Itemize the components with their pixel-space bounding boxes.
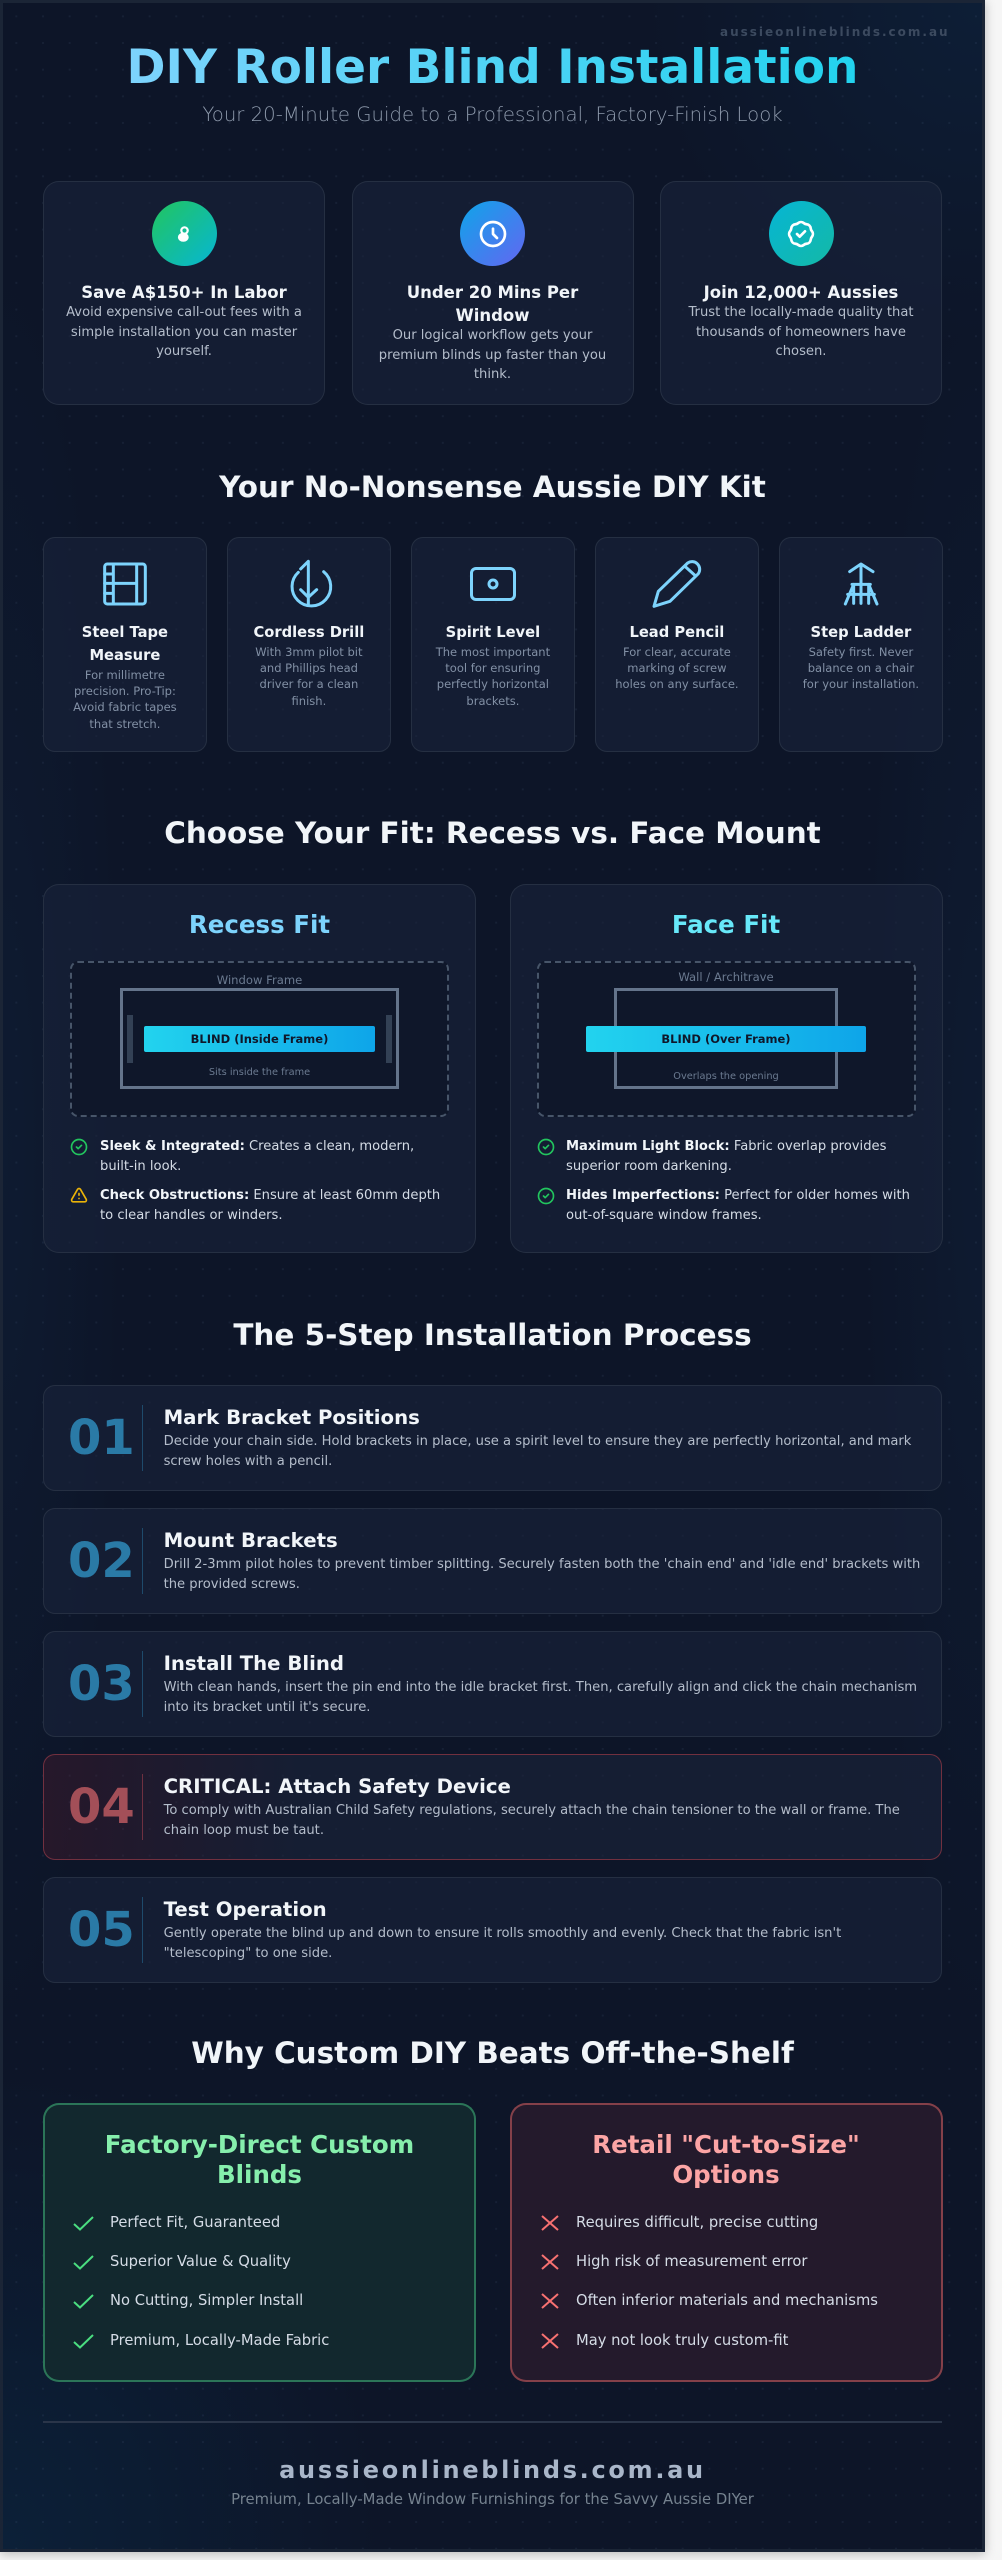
diagram: face fit: Wall / Architrave [678,970,774,984]
text: step 3 description: into its bracket until it's secure. [164,1700,370,1715]
text: step 2 description [164,1557,920,1592]
heading: recess fit: Recess Fit [189,910,330,939]
step number 04: 04 [68,1779,135,1835]
diagram: face fit: BLIND (Over Frame) [661,1032,791,1046]
step number 05: 05 [68,1902,135,1958]
bullet: maximum light block: Maximum Light Block: Fabric overlap provides [566,1139,886,1154]
text: cordless drill description: finish. [292,694,326,708]
text: step ladder description: Safety first. Never [809,644,913,658]
diagram: recess fit: Window Frame [217,973,302,987]
panel: spirit level [411,537,575,752]
list item: difficult cutting: Requires difficult, precise cutting [576,2214,818,2230]
subtitle: Your 20-Minute Guide to a Professional, Factory-Finish Look [202,103,783,126]
panel: step 4 critical [43,1754,942,1860]
list item: perfect fit: Perfect Fit, Guaranteed [110,2214,280,2230]
heading: step ladder: Step Ladder [811,624,911,641]
text: join aussies description: chosen. [776,344,826,359]
panel: save labor [43,181,325,405]
text: cordless drill description: and Phillips head [260,661,358,675]
text: under 20 mins description: Our logical workflow gets your [393,328,592,343]
diagram: face fit [537,961,916,1117]
heading: steel tape measure: Steel Tape [82,624,168,641]
heading: factory-direct: Factory-Direct Custom [105,2130,414,2159]
icon: ladder [844,562,878,606]
list item: premium fabric: Premium, Locally-Made Fabric [110,2332,329,2348]
text: step 1 description: screw holes with a pencil. [164,1454,332,1469]
heading: factory-direct [105,2130,414,2188]
text: step ladder description: balance on a chair [808,661,914,675]
text: save labor description [66,305,302,359]
heading: under 20 mins: Window [456,306,530,324]
panel: lead pencil [595,537,759,752]
text: step ladder description [803,644,919,691]
text: step 2 description: the provided screws. [164,1577,300,1592]
text: step 1 description: Decide your chain side. Hold brackets in place, use a spirit level to ensure they are perfectly horizontal, and mark [164,1434,911,1449]
panel: retail cut-to-size options [510,2103,942,2382]
bullet: check obstructions: to clear handles or winders. [100,1208,283,1223]
bullet: hides imperfections: Hides Imperfections: Perfect for older homes with [566,1188,910,1203]
text: under 20 mins description: premium blinds up faster than you [379,348,606,363]
icon: spirit level [470,567,516,601]
text: join aussies description: thousands of homeowners have [696,325,906,340]
text: spirit level description: brackets. [466,694,519,708]
bullet: sleek and integrated: Sleek & Integrated: Creates a clean, modern, [100,1139,414,1154]
panel: steel tape measure [43,537,207,752]
text: cordless drill description [255,644,362,708]
text: save labor description: Avoid expensive call-out fees with a [66,305,302,320]
text: steel tape description: that stretch. [89,717,160,731]
panel: cordless drill [227,537,391,752]
text: step 1 description [164,1434,912,1469]
panel: under 20 mins [352,181,634,405]
text: steel tape description: Avoid fabric tapes [73,700,177,714]
step number 02: 02 [68,1533,135,1589]
text: steel tape description: For millimetre [85,668,165,682]
footer domain: aussieonlineblinds.com.au [279,2456,706,2484]
text: lead pencil description: marking of screw [627,661,727,675]
diagram: recess fit: BLIND (Inside Frame) [191,1032,328,1046]
text: lead pencil description [615,644,739,691]
icon: tape measure [103,562,147,606]
text: under 20 mins description: think. [474,367,511,382]
text: spirit level description: tool for ensuring [445,661,540,675]
text: step 3 description: With clean hands, insert the pin end into the idle bracket first. Then, carefully align and click the chain mechanism [164,1680,917,1695]
step number 01: 01 [68,1410,135,1466]
list item: not custom: May not look truly custom-fit [576,2332,788,2348]
heading: steel tape measure [82,624,168,664]
title: DIY Roller Blind Installation [127,40,858,95]
text: step 2 description: Drill 2-3mm pilot holes to prevent timber splitting. Securely fasten both the 'chain end' and 'idle end' brackets with [164,1557,920,1572]
heading: installation process: The 5-Step Installation Process [233,1318,752,1352]
text: save labor description: simple installation you can master [71,325,297,340]
text: step 4 description [164,1803,900,1838]
text: spirit level description [436,644,550,708]
panel: step 5 [43,1877,942,1983]
text: step 5 description: "telescoping" to one side. [164,1946,332,1961]
text: steel tape description: precision. Pro-Tip: [74,684,176,698]
step number 03: 03 [68,1656,135,1712]
heading: steel tape measure: Measure [89,647,160,664]
icon: clock [460,201,525,266]
heading: cordless drill: Cordless Drill [254,624,364,641]
panel: step 3 [43,1631,942,1737]
bullet: hides imperfections: out-of-square window frames. [566,1208,762,1223]
heading: why custom: Why Custom DIY Beats Off-the-Shelf [191,2036,794,2070]
heading: under 20 mins [407,282,578,324]
heading: attach safety device: CRITICAL: Attach Safety Device [164,1775,511,1798]
heading: save labor: Save A$150+ In Labor [81,282,287,302]
heading: retail options: Retail "Cut-to-Size" [592,2130,860,2159]
list item: measurement error: High risk of measurement error [576,2253,807,2270]
diagram: recess fit: Sits inside the frame [209,1067,310,1078]
icon: money [152,201,216,266]
heading: face fit: Face Fit [672,910,780,939]
text: step 4 description: chain loop must be taut. [164,1823,324,1838]
heading: factory-direct: Blinds [217,2160,302,2188]
panel: step 2 [43,1508,942,1614]
heading: test operation: Test Operation [164,1898,327,1921]
text: steel tape description [73,668,177,731]
bullet: check obstructions [70,1188,440,1223]
text: step 4 description: To comply with Australian Child Safety regulations, securely attach the chain tensioner to the wall or frame. The [164,1803,900,1818]
heading: mount brackets: Mount Brackets [164,1529,338,1552]
heading: retail options: Options [672,2160,780,2188]
panel: factory-direct custom blinds [43,2103,476,2382]
bullet: sleek and integrated: built-in look. [100,1159,181,1174]
text: step 5 description: Gently operate the blind up and down to ensure it rolls smoothly and evenly. Check that the fabric isn't [164,1926,841,1941]
text: lead pencil description: holes on any surface. [615,677,739,691]
bullet: maximum light block [538,1138,886,1174]
icon: pencil [652,560,702,608]
text: step 3 description [164,1680,917,1715]
heading: mark bracket positions: Mark Bracket Positions [164,1406,420,1429]
text: step 5 description [164,1926,841,1961]
panel: step 1 [43,1385,942,1491]
heading: lead pencil: Lead Pencil [629,624,724,641]
text: lead pencil description: For clear, accurate [623,644,731,658]
bullet: sleek and integrated [70,1138,414,1174]
icon: badge check [768,201,834,266]
heading: under 20 mins: Under 20 Mins Per [407,282,578,302]
heading: install the blind: Install The Blind [164,1652,344,1675]
bullet: check obstructions: Check Obstructions: Ensure at least 60mm depth [100,1188,440,1203]
text: step ladder description: for your installation. [803,677,919,691]
text: join aussies description: Trust the locally-made quality that [688,305,914,320]
text: save labor description: yourself. [156,344,212,359]
icon: drill [290,560,332,608]
text: spirit level description: The most important [436,644,550,658]
bullet: hides imperfections [538,1188,910,1223]
list item: inferior materials: Often inferior materials and mechanisms [576,2292,878,2309]
panel: join aussies [660,181,942,405]
footer tagline: Premium, Locally-Made Window Furnishings for the Savvy Aussie DIYer [231,2491,754,2508]
heading: DIY kit: Your No-Nonsense Aussie DIY Kit [219,470,766,504]
panel: step ladder [779,537,943,752]
heading: join aussies: Join 12,000+ Aussies [704,282,898,302]
watermark: aussieonlineblinds.com.au [720,25,950,39]
panel: recess fit [43,884,476,1253]
bullet: maximum light block: superior room darkening. [566,1159,732,1174]
heading: choose your fit: Choose Your Fit: Recess vs. Face Mount [164,816,821,850]
text: cordless drill description: With 3mm pilot bit [255,644,362,658]
diagram: face fit: Overlaps the opening [673,1071,779,1082]
text: spirit level description: perfectly horizontal [437,677,549,691]
panel: face fit [510,884,942,1253]
list item: no cutting: No Cutting, Simpler Install [110,2292,303,2309]
diagram: recess fit [70,961,449,1117]
heading: retail options [592,2130,860,2188]
text: cordless drill description: driver for a clean [260,677,358,691]
text: join aussies description [688,305,914,359]
list item: superior value: Superior Value & Quality [110,2253,291,2270]
text: under 20 mins description [379,328,606,382]
heading: spirit level: Spirit Level [446,624,540,641]
